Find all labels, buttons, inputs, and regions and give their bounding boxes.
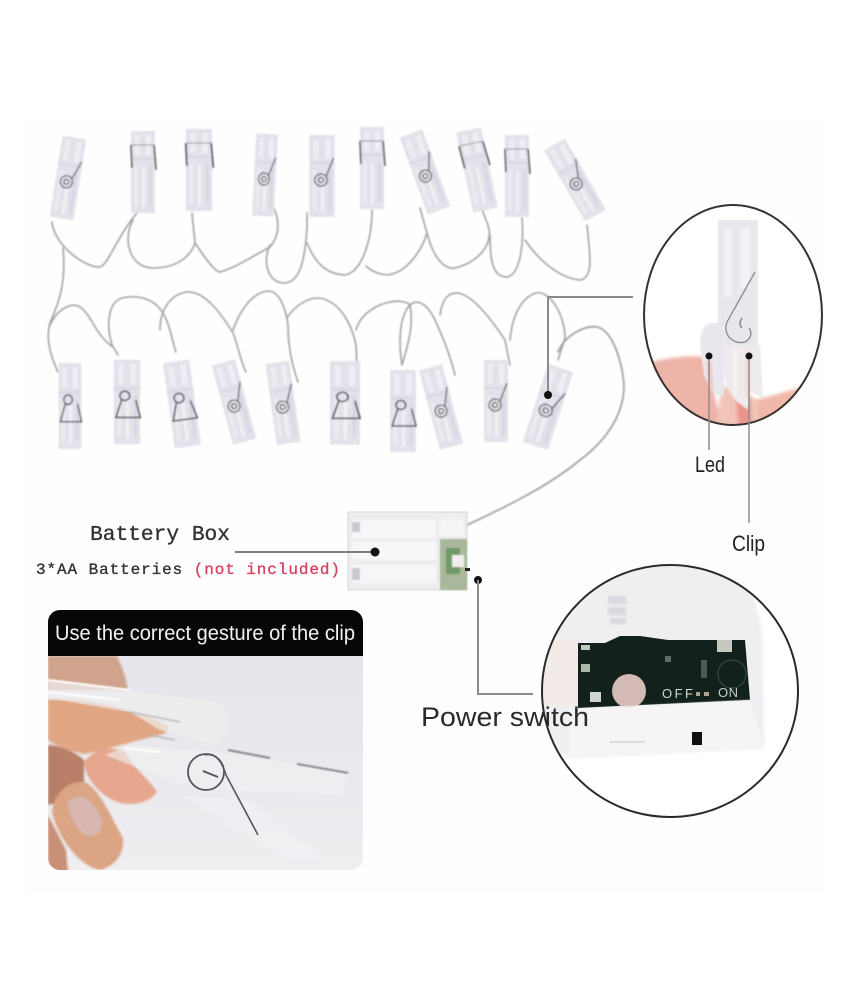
battery callout line [235, 551, 375, 553]
leader to clip detail [544, 297, 633, 399]
photo background [48, 610, 363, 870]
clips: bottom row [59, 359, 573, 452]
clip 4 [252, 133, 278, 217]
detail circle: LED and clip [644, 205, 822, 430]
clip callout [732, 352, 765, 556]
clip 7 [400, 129, 450, 215]
clip label: Clip [732, 531, 765, 556]
clip 20 [523, 364, 573, 450]
ON print: ON [718, 685, 738, 700]
clear clip [48, 678, 349, 774]
clip 14 [212, 359, 256, 445]
spring [726, 272, 755, 343]
header text: Use the correct gesture of the clip [55, 622, 355, 645]
clip 18 [419, 364, 463, 450]
OFF print: OFF [662, 686, 693, 701]
clip 15 [265, 361, 301, 445]
clip 5 [309, 135, 335, 217]
battery box [235, 512, 470, 590]
clip 6 [360, 127, 385, 209]
LED callout [695, 352, 725, 477]
black header bar [48, 610, 363, 656]
clip 2 [131, 131, 156, 213]
led [700, 323, 724, 396]
fingers [48, 656, 169, 872]
box interior [530, 560, 764, 758]
LED label: Led [695, 452, 725, 477]
clip 10 [544, 138, 606, 222]
box front edge [578, 699, 750, 708]
switch [692, 732, 702, 745]
clip body [700, 220, 763, 410]
clip 16 [330, 361, 360, 445]
pink fingers [653, 354, 800, 424]
circuit board [578, 636, 750, 708]
clip 9 [505, 135, 530, 217]
clip 17 [390, 370, 416, 452]
spring [188, 754, 258, 835]
background panel [25, 118, 825, 893]
clip 19 [484, 360, 508, 442]
batteries note: 3*AA Batteries (not included) [36, 561, 340, 579]
light string: wires [48, 197, 624, 525]
clip 3 [186, 129, 213, 211]
power switch callout [474, 576, 533, 694]
clips: top row [50, 127, 606, 222]
clip 8 [456, 127, 499, 213]
panel: correct clip gesture [48, 610, 363, 872]
clip 11 [59, 363, 81, 449]
battery label [36, 524, 340, 579]
power switch label: Power switch [421, 702, 589, 732]
faint marks [608, 596, 626, 624]
detail circle: power switch [530, 560, 798, 817]
clip 13 [163, 360, 201, 448]
clip 12 [114, 360, 140, 444]
clip 1 [50, 136, 86, 220]
battery box heading: Battery Box [90, 524, 230, 547]
connector [544, 642, 578, 704]
